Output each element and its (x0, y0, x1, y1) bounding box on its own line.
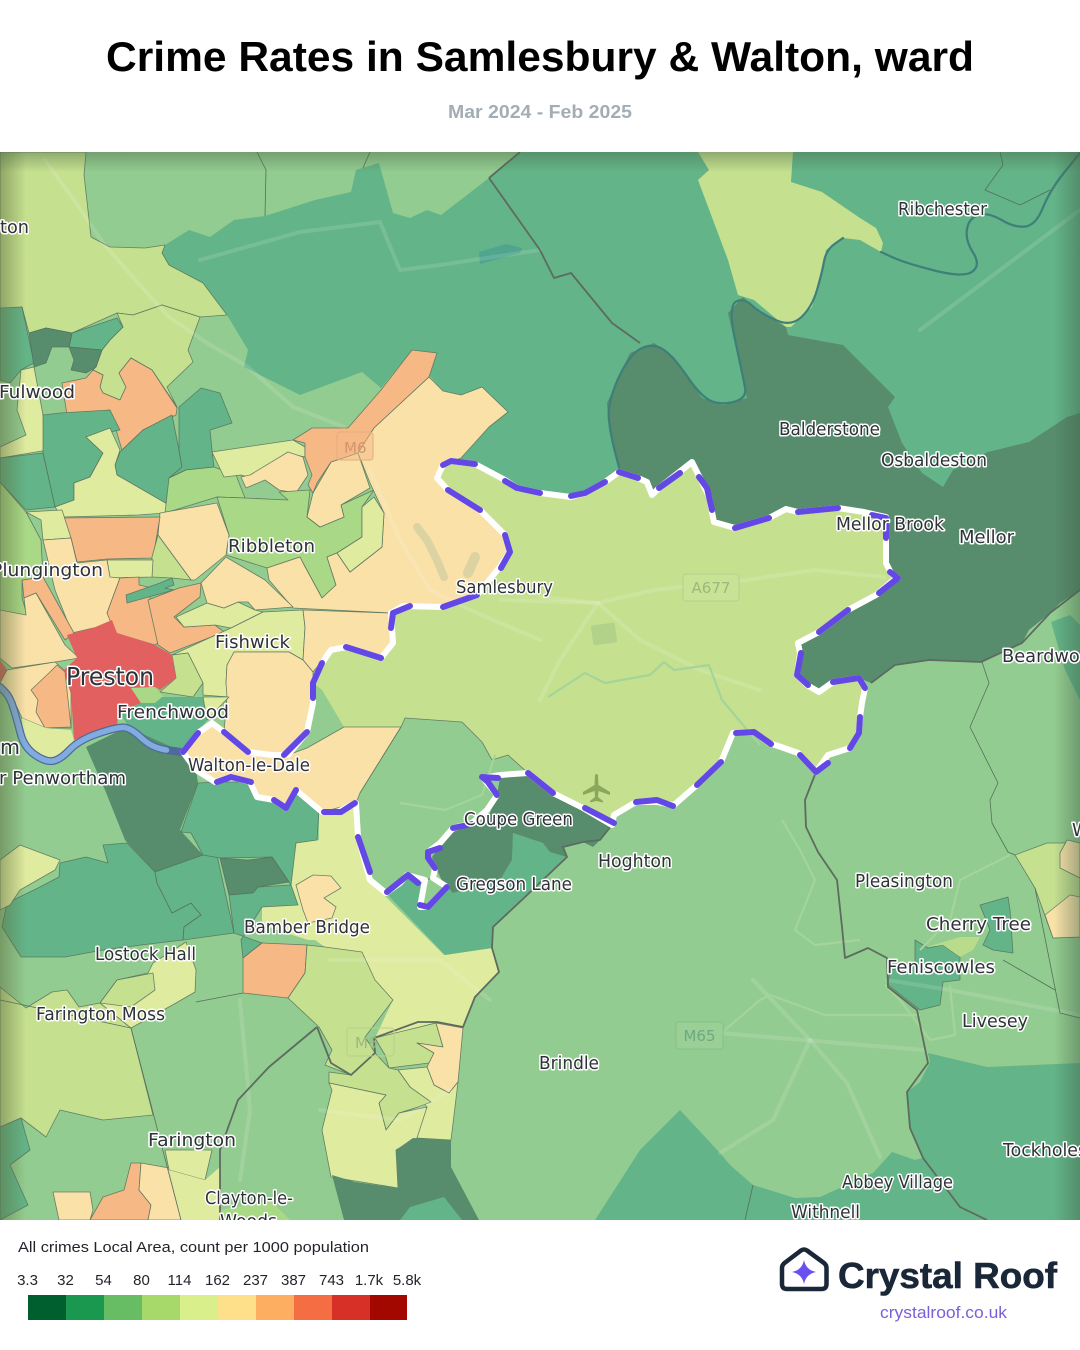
label: Penwortham: r Penwortham (0, 769, 126, 789)
region: mid-green Fulwood patch (69, 318, 123, 350)
road shield: M65: M65 (683, 1027, 716, 1045)
legend values: 3.3 (17, 1272, 38, 1289)
label: Pleasington: Pleasington (855, 872, 953, 892)
title: Crime Rates in Samlesbury & Walton, ward (106, 33, 974, 80)
label: Preston: Preston (66, 662, 154, 691)
legend values: 114 (168, 1272, 191, 1289)
label: Cherry Tree: Cherry Tree (926, 915, 1031, 935)
choropleth map (0, 152, 1080, 1232)
label: Mellor Brook: Mellor Brook (836, 515, 945, 535)
region: mid-green Gregson Lane (386, 833, 567, 955)
region: dark Balderstone and Mellor (607, 297, 1080, 692)
legend values: 32 (57, 1272, 74, 1289)
region: cream west block (158, 503, 229, 580)
region: Fulwood west mid-green (0, 307, 34, 383)
website url: crystalroof.co.uk (880, 1304, 1008, 1322)
label: Hoghton: Hoghton (598, 852, 672, 872)
label: Farington: Farington (148, 1131, 236, 1151)
label: Fulwood: Fulwood (0, 383, 75, 403)
region: north and east mid-green (162, 152, 1080, 520)
region: lime north of Fulwood (93, 305, 200, 407)
region: ward lime (313, 461, 898, 825)
region: light green Ribbleton (217, 490, 374, 598)
label: Lostock Hall: Lostock Hall (95, 945, 196, 965)
label: Withnell: Withnell (791, 1203, 860, 1223)
legend title: All crimes Local Area, count per 1000 population (18, 1239, 369, 1256)
road shield: M6 north (337, 432, 373, 460)
region: orange strip along M6 (293, 350, 437, 493)
label: Bamber Bridge: Bamber Bridge (244, 918, 370, 938)
wordmark: Crystal Roof (838, 1255, 1058, 1296)
ward streams (400, 662, 1010, 1040)
region: red Preston centre (0, 593, 79, 668)
region: light green inside ward concavity (356, 718, 528, 893)
region: Walton-le-Dale cream (183, 723, 401, 813)
label: Gregson Lane: Gregson Lane (456, 875, 572, 895)
label: ton (clipped): ton (0, 218, 29, 238)
legend values: 80 (133, 1272, 150, 1289)
legend values: 387 (281, 1272, 306, 1289)
road shield: A677 (683, 574, 739, 601)
region: south-east mid-green (595, 1053, 1080, 1220)
label: Woods (clipped): Woods (220, 1212, 277, 1232)
label: Frenchwood: Frenchwood (117, 703, 229, 723)
region: Farington lime (0, 987, 153, 1137)
label: Osbaldeston: Osbaldeston (881, 451, 987, 471)
region: Fulwood orange (62, 358, 177, 450)
label: Feniscowles: Feniscowles (887, 958, 995, 978)
label: Brindle: Brindle (539, 1054, 599, 1074)
legend values: 1.7k (355, 1272, 384, 1289)
thin ward lines (0, 152, 1080, 1220)
region: cream north of ward (303, 610, 393, 672)
region: east edge lime and cream (1015, 843, 1080, 938)
label: Mellor: Mellor (959, 528, 1015, 548)
label: m (clipped): m (0, 735, 20, 759)
choropleth regions (0, 152, 1080, 1220)
region: cream Plungington (43, 538, 120, 633)
region: pale Penwortham west (0, 845, 60, 910)
solar farm patch (591, 622, 617, 646)
map background (0, 152, 1080, 1220)
legend colour scale (28, 1295, 407, 1320)
region: dark Penwortham (86, 727, 203, 872)
region: pale centre north (55, 428, 169, 517)
region: north-west lime (0, 152, 227, 333)
region: cream lobe (224, 652, 313, 755)
road shield: M6 north: M6 (344, 439, 366, 457)
legend values: 54 (95, 1272, 112, 1289)
ward outline (183, 461, 898, 907)
white outline (183, 461, 898, 907)
label: Balderstone: Balderstone (779, 420, 880, 440)
legend values (17, 1272, 422, 1289)
region: orange block (62, 517, 160, 562)
road shield: M65 (676, 1022, 723, 1049)
legend values: 162 (205, 1272, 230, 1289)
brand logo (782, 1250, 1058, 1322)
region: dark south (332, 1138, 479, 1220)
icon: airport (583, 774, 610, 802)
region: mid-green west of Fulwood (43, 410, 120, 507)
legend (17, 1239, 422, 1320)
airfield patches (417, 527, 444, 577)
label: Ribbleton: Ribbleton (228, 537, 315, 557)
district boundary lines (220, 152, 1080, 1220)
river Ribble at Preston (0, 687, 181, 761)
region: orange Bamber Bridge (243, 943, 307, 998)
icon: house with star (782, 1250, 826, 1289)
label: Fishwick: Fishwick (215, 633, 291, 653)
region: lime Ribchester patch (698, 152, 883, 327)
place labels (0, 200, 1080, 1232)
label: Ribchester: Ribchester (898, 200, 988, 220)
purple dashes (183, 461, 898, 907)
region: pale Bamber Bridge (262, 805, 498, 1038)
label: Walton-le-Dale: Walton-le-Dale (188, 756, 310, 776)
region: large cream Samlesbury (267, 377, 510, 613)
map edge vignette (0, 152, 1080, 1220)
road shield: M6 south: M6 (355, 1034, 378, 1052)
region: dark Fulwood patch (29, 328, 72, 367)
label: Farington Moss: Farington Moss (36, 1005, 165, 1025)
faint roads (45, 160, 1080, 1180)
legend values: 237 (243, 1272, 268, 1289)
region: south of M65 patches (375, 1023, 443, 1068)
teal strip (479, 244, 522, 264)
label: Clayton-le-Woods: Clayton-le- (205, 1189, 293, 1209)
label: Abbey Village: Abbey Village (842, 1173, 953, 1193)
road shield: A677: A677 (692, 579, 730, 597)
legend values: 743 (319, 1272, 344, 1289)
region: mid-green south-west blocks (2, 843, 201, 957)
region: bottom-left blocks (0, 1118, 30, 1220)
legend values: 5.8k (393, 1272, 422, 1289)
river Ribble north loops (609, 153, 1080, 467)
region: cream east Ribbleton (307, 453, 370, 527)
label: Samlesbury: Samlesbury (456, 578, 553, 598)
road shield: M6 south (347, 1028, 394, 1056)
label: Livesey: Livesey (962, 1012, 1028, 1032)
label: Coupe Green: Coupe Green (464, 810, 573, 830)
subtitle: date range: Mar 2024 - Feb 2025 (448, 102, 632, 122)
region: Frenchwood mid-green (122, 697, 207, 748)
region: pale patch east of Ribbleton (337, 497, 384, 572)
region: dark Coupe Green (432, 775, 613, 893)
